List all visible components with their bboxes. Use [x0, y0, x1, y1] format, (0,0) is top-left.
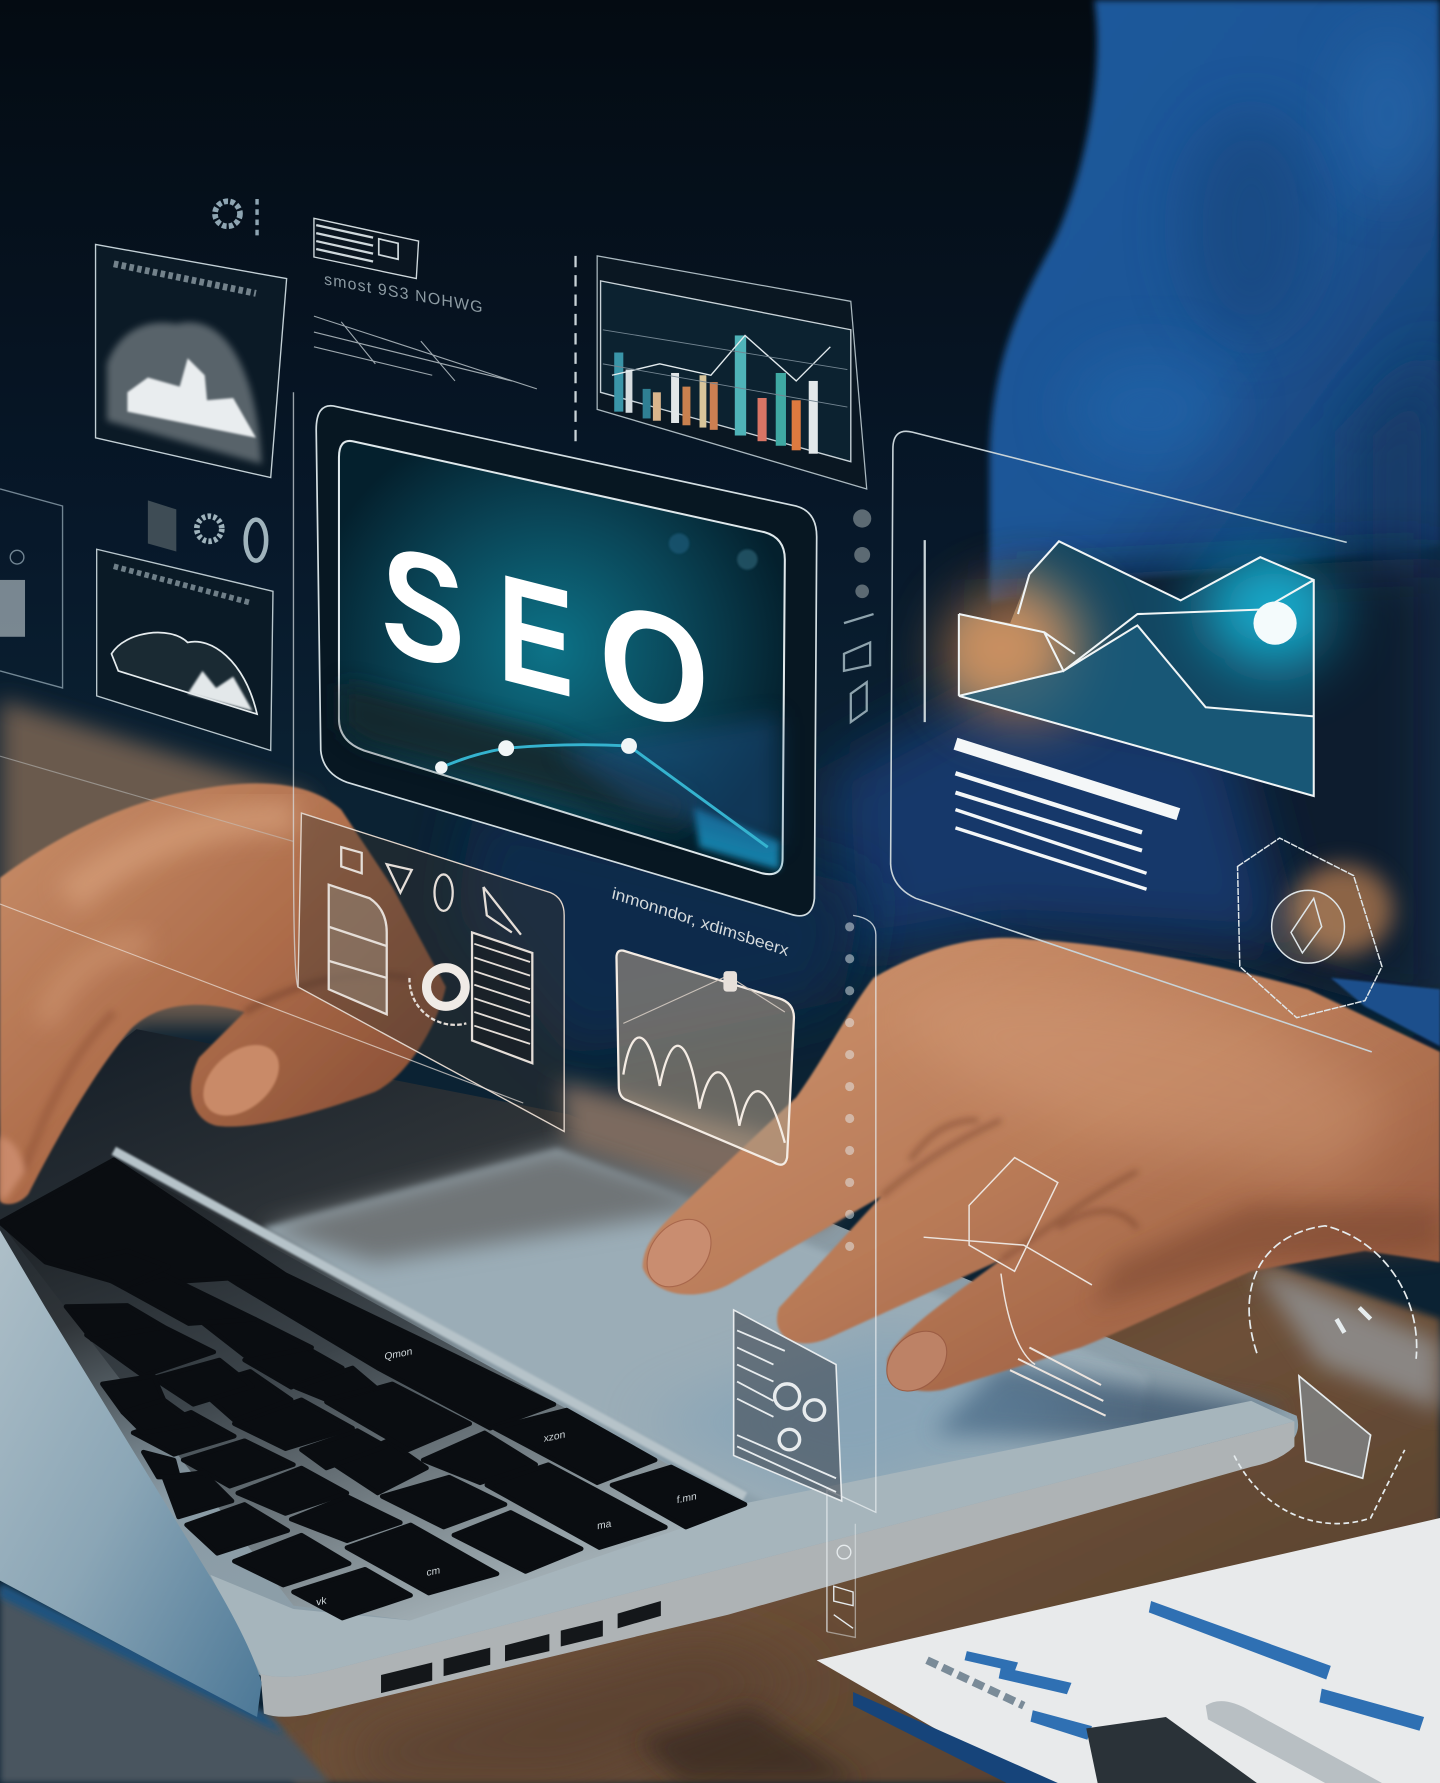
- laptop base: [0, 1029, 1298, 1684]
- laptop lid: [0, 1230, 262, 1717]
- SEO text: O: [599, 567, 709, 765]
- fingernails: [634, 1207, 724, 1299]
- wooden desk right and bottom: [0, 1239, 1440, 1783]
- key legends: Qmon: [384, 1346, 413, 1363]
- trackpad: [262, 1148, 1149, 1512]
- keyboard well: [0, 1160, 745, 1620]
- hologram: overlays on right hand: [924, 1158, 1106, 1416]
- hologram: bar chart panel: [576, 256, 867, 489]
- SEO screen: [339, 441, 785, 874]
- side vents: [381, 1601, 661, 1693]
- chart bars: [614, 335, 818, 454]
- front band: [260, 1421, 1294, 1717]
- text bars: [955, 744, 1178, 889]
- hologram: SEO panel outer frame and screen: [316, 406, 817, 916]
- SEO text: S: [381, 511, 465, 702]
- palm rest front: [210, 1401, 1294, 1677]
- area chart: [958, 540, 1315, 798]
- key legends: cm: [427, 1565, 440, 1579]
- keyboard keys: [0, 1160, 745, 1618]
- wooden desk behind left hand: [0, 699, 375, 1126]
- key legends: f.mn: [677, 1491, 697, 1506]
- hologram: caption text: inmonndor, xdimsbeerx: [612, 883, 789, 961]
- hologram: tall glass strip: [827, 915, 876, 1637]
- palm rest edge: [114, 1151, 745, 1496]
- hologram: wave chart panel: [616, 950, 794, 1165]
- hologram: polygon globe near wrist: [1238, 838, 1382, 1018]
- hologram: striped tag over finger: [734, 1310, 842, 1501]
- hologram: vertical dot strip: [844, 509, 874, 722]
- finger creases: [882, 1120, 1137, 1260]
- SEO text: E: [498, 541, 574, 730]
- key legends: xzon: [544, 1430, 566, 1445]
- key legends: [316, 1346, 697, 1609]
- right hand: [634, 938, 1440, 1403]
- hologram: faint left edge panel: [0, 489, 63, 688]
- hologram: vertical guide lines: [293, 392, 298, 987]
- SEO trend line: [435, 738, 768, 847]
- hologram: icon tray panel over left hand: [0, 756, 564, 1131]
- reflection on palm rest: [557, 1080, 864, 1228]
- key legends: vk: [316, 1595, 327, 1609]
- laptop: [0, 1029, 1298, 1717]
- hologram: video and text panel: [314, 218, 537, 389]
- key legends: ma: [597, 1519, 612, 1532]
- pen: [1086, 1717, 1257, 1783]
- SEO text: [381, 511, 709, 765]
- hologram: mountain thumbnail panel: [96, 244, 287, 478]
- hologram: second mountain panel: [97, 549, 273, 750]
- hologram: dashed circle lower right: [1234, 1226, 1417, 1524]
- document on desk: [817, 1518, 1440, 1783]
- hologram: right panel with area chart: [891, 431, 1372, 1052]
- hologram: small dials: [148, 500, 266, 561]
- hologram: video and text panel: smost 9S3 NOHWG: [324, 270, 484, 317]
- lower shadow on screen: [341, 682, 694, 830]
- left hand: [0, 783, 446, 1204]
- blue shirt torso: [455, 0, 1440, 1058]
- hologram: round dial top: [215, 199, 257, 239]
- tray icons: [329, 847, 532, 1063]
